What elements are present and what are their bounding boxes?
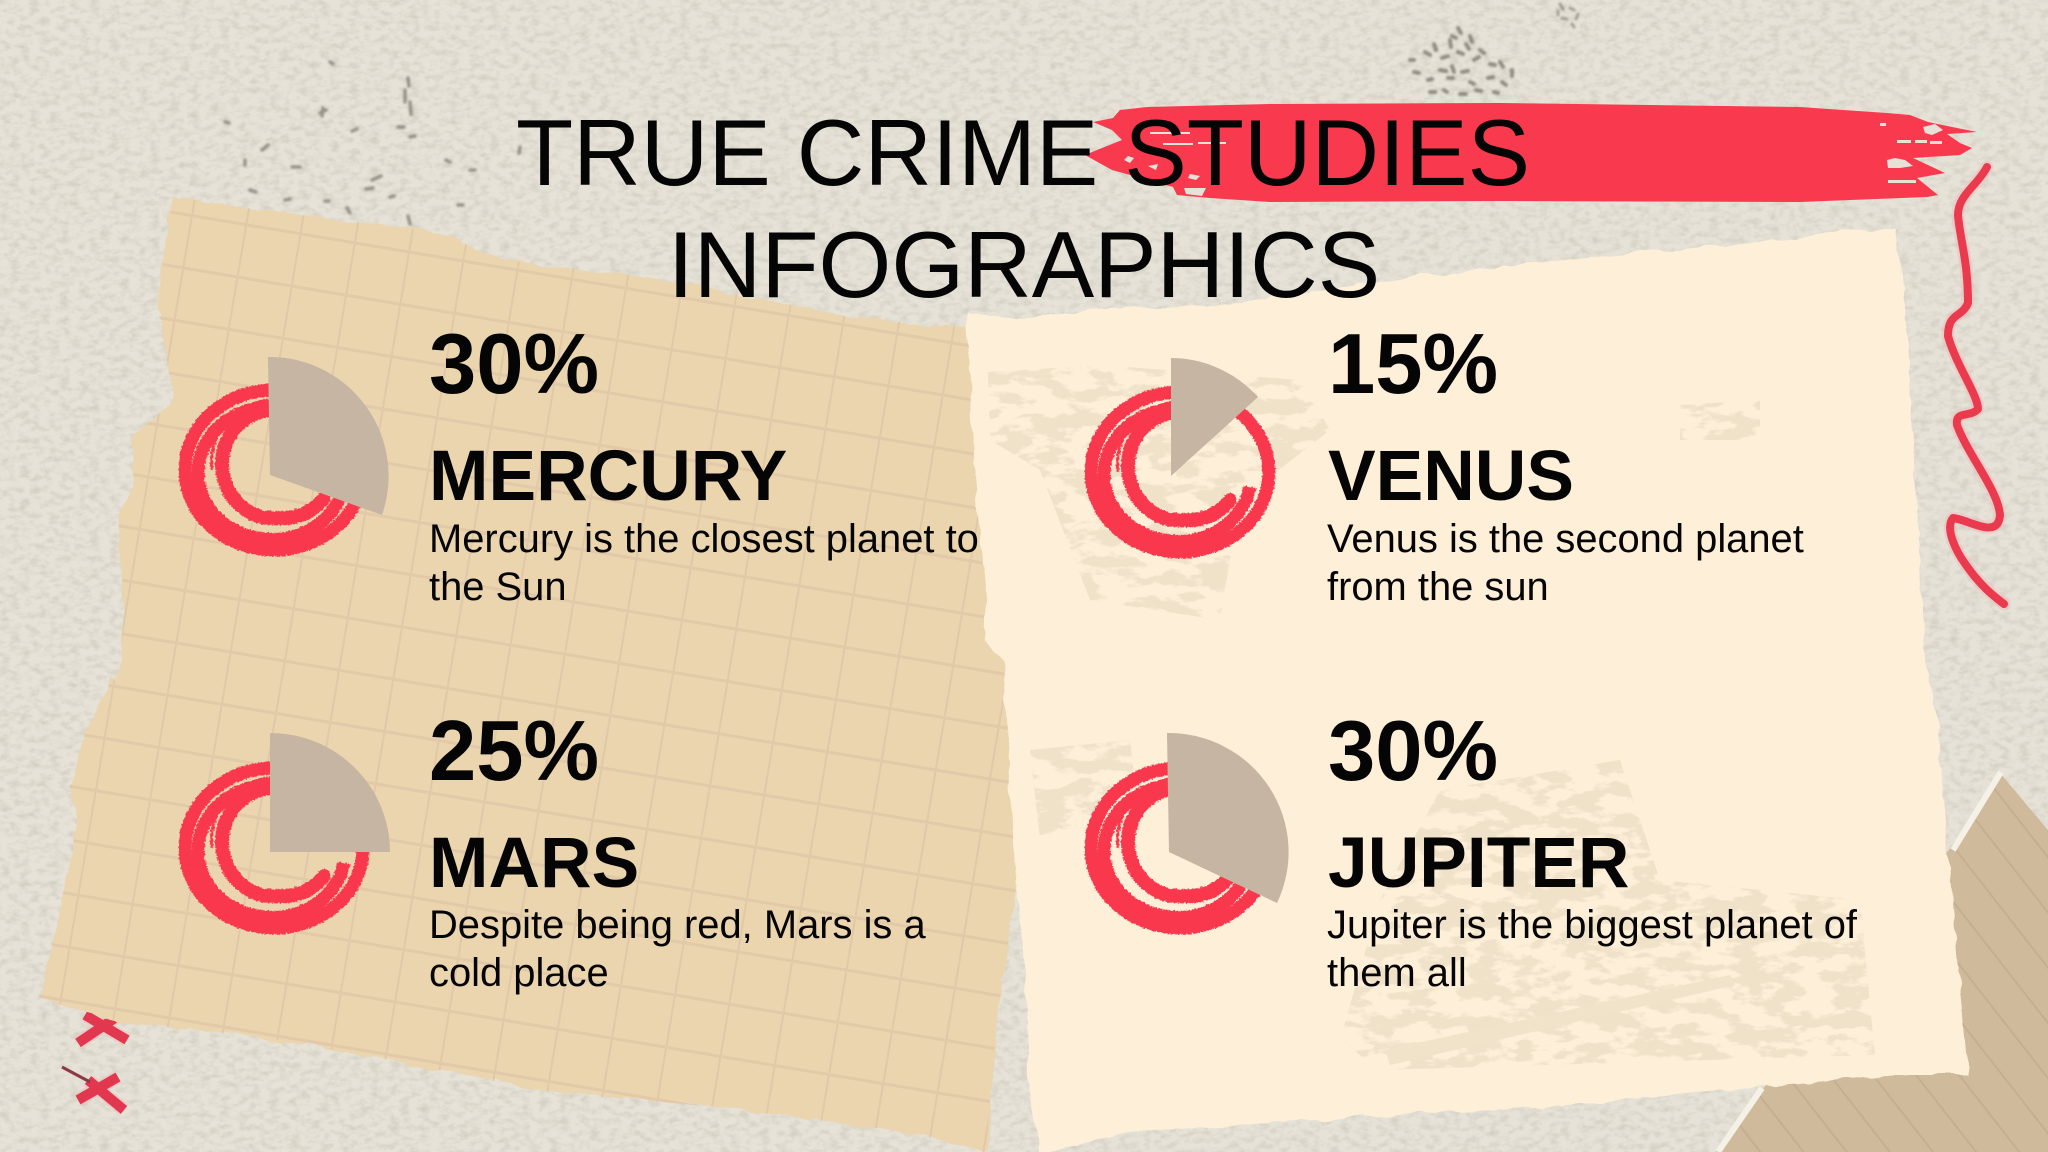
Mercury name: MERCURY [429, 436, 787, 516]
Jupiter name: JUPITER [1328, 823, 1630, 903]
Venus description: Venus is the second planet [1327, 517, 1804, 561]
Jupiter percentage: 30% [1328, 704, 1498, 799]
paper stains on cream paper [988, 365, 1875, 1070]
title [516, 100, 1530, 317]
Mercury description: the Sun [429, 565, 567, 609]
panel: Jupiter item [1091, 704, 1858, 995]
Mars description: Despite being red, Mars is a [429, 903, 926, 947]
Mars percentage: 25% [429, 704, 599, 799]
pie chart: Venus 15% [1091, 358, 1269, 552]
Jupiter description: them all [1327, 951, 1467, 995]
Mars description: cold place [429, 951, 609, 995]
pie chart: Mars 25% [185, 733, 390, 928]
title: INFOGRAPHICS [668, 212, 1380, 317]
Mercury percentage: 30% [429, 317, 599, 412]
red cross marks, bottom left [62, 1015, 127, 1110]
red squiggle, right edge [1948, 167, 2004, 604]
pie chart: Jupiter 30% [1091, 733, 1289, 928]
Mercury description: Mercury is the closest planet to [429, 517, 979, 561]
panel: Mercury item [185, 317, 979, 609]
brush dry-bristle gaps [1124, 123, 1943, 196]
Venus description: from the sun [1327, 565, 1549, 609]
panel: Mars item [185, 704, 926, 995]
title: TRUE CRIME STUDIES [516, 100, 1530, 205]
pie chart: Mercury 30% [185, 357, 389, 550]
panel: Venus item [1091, 317, 1804, 609]
Venus name: VENUS [1328, 436, 1574, 516]
Mars name: MARS [429, 823, 639, 903]
Jupiter description: Jupiter is the biggest planet of [1327, 903, 1858, 947]
brown lined paper scrap, bottom right [1700, 760, 2048, 1152]
Venus percentage: 15% [1328, 317, 1498, 412]
panel: left grid paper [39, 196, 1016, 1152]
panel: right cream paper [967, 229, 1968, 1152]
red brush stroke behind title [1085, 103, 1977, 202]
